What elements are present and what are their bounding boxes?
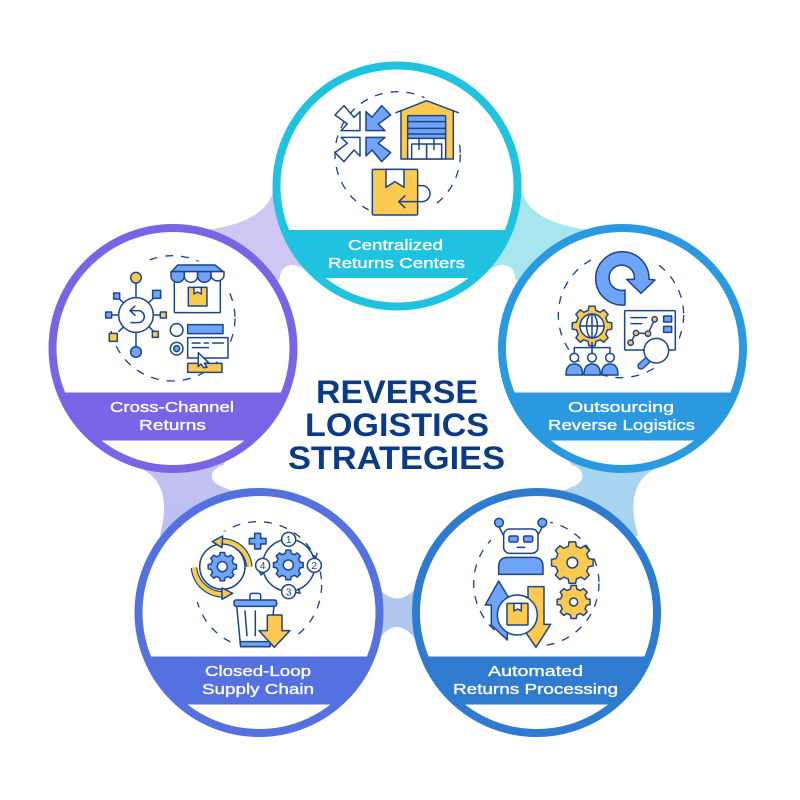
label band: [424, 656, 650, 704]
ring: [416, 492, 657, 733]
panel: automated returns processing: [416, 492, 657, 733]
label band: [510, 392, 736, 440]
label: Closed-Loop: [205, 663, 311, 680]
panel: cross-channel returns: [52, 228, 294, 469]
icon: arrows, warehouse and return box: [335, 92, 460, 217]
title: [288, 374, 505, 476]
icon: loops, numbered cycle and recycling bin: 2: [312, 561, 318, 572]
connector: right to bottom right: [500, 347, 662, 612]
label: Returns Processing: [453, 681, 618, 698]
ring: [138, 492, 380, 733]
panel: centralized returns centers: [276, 66, 518, 306]
icon: cycle arrow, global team and analytics: [558, 252, 684, 378]
icon: network hub, store and online order: [105, 256, 235, 381]
central white area: [212, 265, 582, 598]
connector: top to right: [397, 186, 622, 347]
icon: loops, numbered cycle and recycling bin: 3: [286, 587, 292, 598]
title: STRATEGIES: [288, 440, 505, 476]
label: Cross-Channel: [110, 399, 234, 416]
label: Reverse Logistics: [548, 417, 695, 434]
ring: [502, 228, 743, 469]
icon: loops, numbered cycle and recycling bin: [193, 522, 322, 648]
label: [453, 663, 618, 698]
ring: [276, 66, 518, 306]
icon: loops, numbered cycle and recycling bin: 1: [286, 535, 292, 546]
label: [202, 663, 314, 698]
label: Centralized: [348, 237, 443, 254]
label: Automated: [488, 663, 583, 680]
title: REVERSE: [316, 374, 478, 410]
title: LOGISTICS: [305, 407, 489, 443]
connector: bottom circles: [378, 585, 416, 640]
connector: top to left: [173, 186, 397, 347]
icon: robot, gears and up-down arrows: [474, 518, 599, 647]
label: [328, 237, 465, 272]
label: Supply Chain: [202, 681, 314, 698]
label band: [284, 230, 510, 278]
icon: loops, numbered cycle and recycling bin: 4: [260, 561, 266, 572]
label: [548, 399, 695, 434]
label: Outsourcing: [568, 399, 674, 416]
ring: [52, 228, 294, 469]
label: Returns Centers: [328, 255, 465, 272]
panel: outsourcing reverse logistics: [502, 228, 743, 469]
label: Returns: [139, 417, 206, 434]
label: [110, 399, 234, 434]
label band: [60, 392, 286, 440]
label band: [146, 656, 372, 704]
panel: closed-loop supply chain: [138, 492, 380, 733]
connector: left to bottom left: [135, 347, 300, 612]
